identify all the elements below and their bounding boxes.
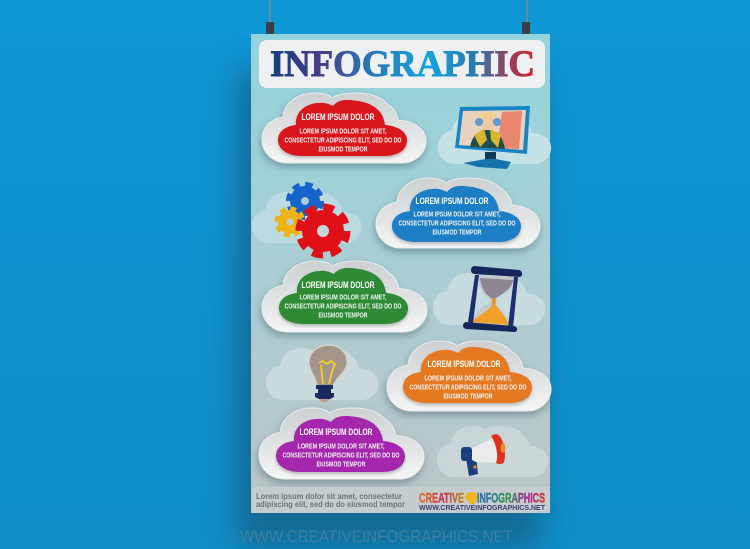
icon: hourglass (463, 266, 522, 332)
footer text: adipiscing elit, sed do do eiusmod tempor (256, 499, 406, 509)
logo: INFOGRAPHICS (477, 490, 545, 506)
panel: blue cloud: LOREM IPSUM DOLOR (416, 196, 489, 207)
icon: blue gear (288, 184, 322, 218)
icon: megaphone (461, 434, 506, 476)
poster (251, 34, 551, 513)
panel: purple cloud (259, 408, 424, 479)
watermark: WWW.CREATIVEINFOGRAPHICS.NET (240, 528, 513, 546)
hanger: left clip (266, 0, 274, 39)
logo: CREATIVE (419, 490, 464, 506)
panel: monitor cloud (438, 106, 551, 169)
panel: green cloud: LOREM IPSUM DOLOR (302, 280, 375, 291)
panel: red cloud: CONSECTETUR ADIPISCING ELIT, SED DO DO (284, 138, 402, 144)
panel: orange cloud (387, 341, 551, 411)
footer text: Lorem ipsum dolor sit amet, consectetur (256, 491, 403, 501)
icon: monitor (455, 106, 530, 169)
panel: purple cloud: LOREM IPSUM DOLOR SIT AMET, (298, 444, 385, 450)
panel: blue cloud: LOREM IPSUM DOLOR SIT AMET, (414, 212, 501, 218)
panel: red cloud: EIUSMOD TEMPOR (318, 146, 368, 154)
panel: red cloud: LOREM IPSUM DOLOR SIT AMET, (300, 128, 387, 136)
pale cloud (266, 348, 378, 400)
icon: yellow gear (276, 208, 304, 236)
hanger: right clip (522, 0, 530, 39)
footer band (252, 487, 550, 513)
title: INFOGRAPHIC (270, 44, 535, 85)
panel: gears cloud (252, 184, 362, 255)
pale cloud (252, 192, 362, 243)
panel: orange cloud: EIUSMOD TEMPOR (444, 394, 492, 400)
logo: WWW.CREATIVEINFOGRAPHICS.NET (419, 505, 546, 512)
title banner (259, 40, 545, 88)
pale cloud (438, 113, 551, 164)
footer text (256, 491, 406, 509)
panel: blue cloud (376, 178, 540, 248)
panel: orange cloud: LOREM IPSUM DOLOR (428, 359, 501, 370)
panel: green cloud: LOREM IPSUM DOLOR SIT AMET, (300, 294, 387, 302)
panel: green cloud: CONSECTETUR ADIPISCING ELIT, SED DO DO (284, 304, 402, 310)
panel: green cloud: EIUSMOD TEMPOR (318, 312, 368, 320)
panel: purple cloud: EIUSMOD TEMPOR (316, 462, 366, 468)
panel: green cloud (262, 261, 427, 332)
panel: purple cloud: LOREM IPSUM DOLOR (300, 427, 373, 438)
panel: blue cloud: EIUSMOD TEMPOR (432, 230, 482, 236)
panel: red cloud: LOREM IPSUM DOLOR (302, 112, 375, 123)
panel: red cloud (262, 93, 426, 163)
panel: bulb cloud (266, 345, 378, 402)
panel: purple cloud: CONSECTETUR ADIPISCING ELIT, SED DO DO (282, 452, 400, 460)
panel: blue cloud: CONSECTETUR ADIPISCING ELIT, SED DO DO (398, 220, 516, 228)
panel: orange cloud: CONSECTETUR ADIPISCING ELIT, SED DO DO (410, 384, 527, 392)
pale cloud (437, 426, 549, 477)
icon: light bulb (309, 345, 347, 402)
panel: orange cloud: LOREM IPSUM DOLOR SIT AMET, (424, 376, 512, 382)
panel: megaphone cloud (437, 426, 549, 477)
panel: hourglass cloud (433, 266, 545, 332)
pale cloud (433, 273, 545, 325)
logo (419, 490, 546, 512)
icon: red gear (299, 207, 347, 255)
